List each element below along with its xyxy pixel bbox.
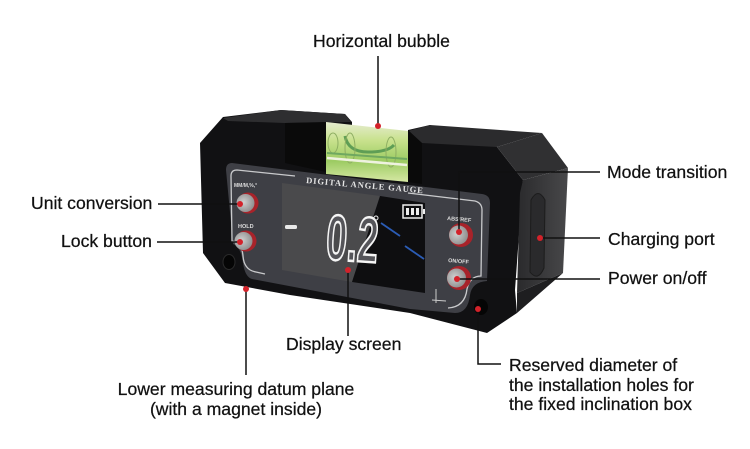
callout: mode transition: Mode transition: [607, 162, 727, 182]
button: mode: ABS/REF: [447, 216, 472, 224]
callout: power on/off: Power on/off: [608, 268, 707, 288]
button: mode: [447, 216, 473, 247]
callout: lock button: Lock button: [61, 231, 152, 251]
face plate: [226, 163, 490, 313]
body: side top facet: [497, 133, 568, 180]
callout: reserved diameter: [475, 306, 694, 414]
button: power: ON/OFF: [448, 258, 470, 266]
callout: lower measuring datum plane: [118, 286, 354, 419]
callout: horizontal bubble: Horizontal bubble: [313, 31, 450, 51]
charging port cover: [530, 194, 545, 276]
callout: display screen: [286, 267, 401, 354]
reading: 0.2: [324, 201, 381, 277]
callout: reserved diameter: the installation holes for: [509, 375, 694, 395]
callout: unit conversion: [31, 193, 243, 213]
callout: reserved diameter: the fixed inclination box: [509, 394, 692, 414]
plate outline trim: [231, 170, 295, 274]
button: unit conversion: [234, 183, 258, 214]
blue marks: [381, 223, 400, 236]
callout: display screen: Display screen: [286, 334, 401, 354]
callout: horizontal bubble: [313, 31, 450, 129]
callout: unit conversion: Unit conversion: [31, 193, 152, 213]
callout: power on/off: [454, 268, 707, 288]
vial sockets: [285, 122, 326, 172]
button: lock: [234, 224, 256, 252]
button: unit conversion: MM/M,%,°: [234, 183, 257, 189]
title: digital angle gauge: DIGITAL ANGLE GAUGE: [306, 175, 424, 195]
horizontal bubble vial: [326, 122, 408, 182]
axis mark: [432, 289, 446, 303]
button: lock: HOLD: [238, 224, 254, 230]
callout: lower measuring datum plane: Lower measuring datum plane: [118, 379, 354, 399]
body: main block: [200, 110, 523, 333]
display screen: [282, 183, 425, 293]
battery icon: [403, 205, 425, 218]
callout: reserved diameter: Reserved diameter of: [509, 355, 677, 375]
callout: mode transition: [456, 162, 727, 235]
minus sign: [285, 225, 297, 229]
callout: lower measuring datum plane: (with a magnet inside): [150, 399, 322, 419]
callout: charging port: Charging port: [608, 229, 715, 249]
callout: lock button: [61, 231, 243, 251]
callout: charging port: [537, 229, 715, 249]
right mounting hole: [474, 299, 488, 315]
left mounting hole: [223, 254, 235, 270]
button: power: [447, 258, 471, 290]
top facets: [223, 110, 351, 123]
gauge device: [200, 110, 568, 333]
body: side lower facet: [517, 273, 563, 313]
body: side panel: [517, 168, 568, 293]
